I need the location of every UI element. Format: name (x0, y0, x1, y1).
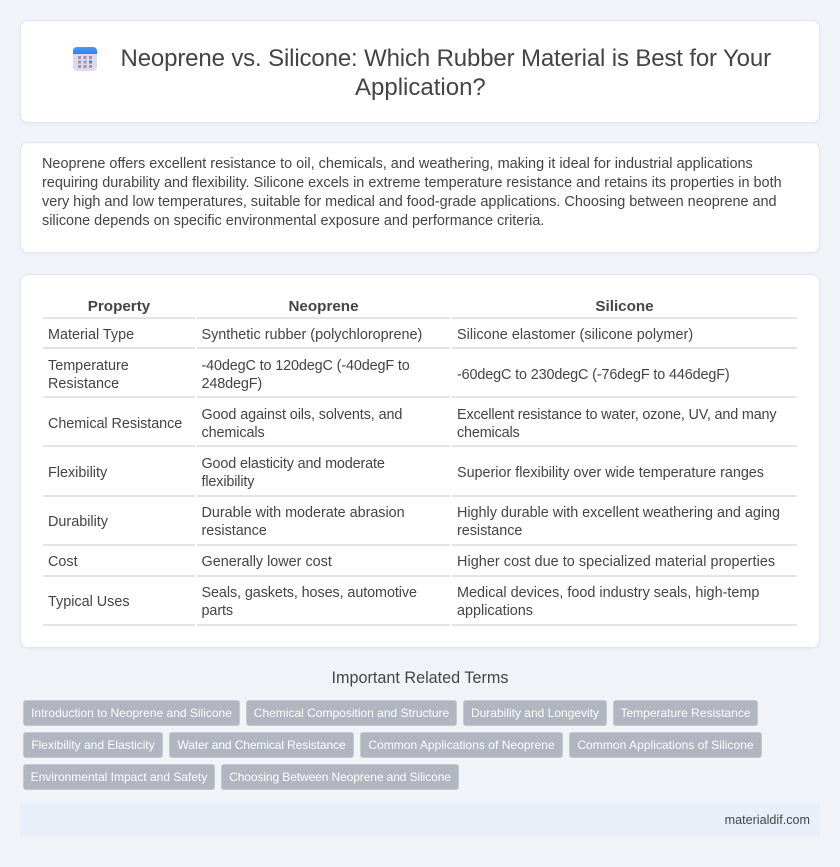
comparison table: Generally lower cost (202, 554, 332, 570)
row: Temperature Resistance (48, 358, 730, 392)
comparison table: Silicone elastomer (silicone polymer) (457, 327, 693, 343)
comparison table: chemicals (202, 425, 265, 441)
tag: Common Applications of Silicone (577, 738, 754, 752)
text: site name: materialdif.com (725, 813, 810, 827)
comparison table: Superior flexibility over wide temperature ranges (457, 465, 764, 481)
column header: Neoprene: Neoprene (288, 298, 359, 315)
tag (169, 732, 354, 758)
tag (463, 700, 607, 726)
tag: Environmental Impact and Safety (31, 770, 207, 784)
text: description paragraph: requiring durability and flexibility. Silicone excels in extreme temperature resistance and retains its properties in both (42, 175, 782, 191)
tag (569, 732, 762, 758)
comparison table: 248degF) (202, 376, 262, 392)
tag (221, 764, 459, 790)
tag: Introduction to Neoprene and Silicone (31, 706, 232, 720)
column header: Silicone: Silicone (595, 298, 654, 315)
comparison table: applications (457, 603, 533, 619)
tag (23, 700, 240, 726)
tag (23, 764, 215, 790)
comparison table: parts (202, 603, 233, 619)
icon: calendar grid (73, 47, 97, 71)
comparison table: Excellent resistance to water, ozone, UV, and many (457, 407, 776, 423)
comparison table: Higher cost due to specialized material properties (457, 554, 775, 570)
tag: Flexibility and Elasticity (31, 738, 155, 752)
comparison table: Temperature (48, 358, 129, 374)
panel: title header (20, 20, 820, 123)
comparison table: -60degC to 230degC (-76degF to 446degF) (457, 367, 730, 383)
footer bar (20, 803, 820, 837)
comparison table: resistance (457, 523, 522, 539)
row: Typical Uses (48, 585, 759, 619)
comparison table: Typical Uses (48, 594, 130, 610)
tag (23, 732, 163, 758)
title: Application? (355, 74, 486, 101)
comparison table: flexibility (202, 474, 254, 490)
comparison table: Good elasticity and moderate (202, 456, 385, 472)
comparison table: Seals, gaskets, hoses, automotive (202, 585, 417, 601)
comparison table: Durability (48, 514, 108, 530)
tag: Water and Chemical Resistance (177, 738, 346, 752)
tag: Common Applications of Neoprene (368, 738, 555, 752)
text: description paragraph: very high and low temperatures, suitable for medical and food-grade applications. Choosing between neoprene and (42, 194, 777, 210)
row: Cost (48, 554, 775, 570)
tag: Temperature Resistance (620, 706, 751, 720)
heading: Important Related Terms: Important Related Terms (332, 669, 508, 687)
tags: related terms (23, 700, 762, 790)
comparison table: Medical devices, food industry seals, high-temp (457, 585, 759, 601)
row: Flexibility (48, 456, 764, 490)
comparison table (43, 298, 797, 626)
tag: Choosing Between Neoprene and Silicone (229, 770, 451, 784)
title (120, 45, 771, 101)
text: description paragraph: Neoprene offers excellent resistance to oil, chemicals, and weathering, making it ideal for industrial applications (42, 156, 753, 172)
panel: description (20, 142, 820, 253)
comparison table: chemicals (457, 425, 520, 441)
tag (613, 700, 758, 726)
comparison table: Good against oils, solvents, and (202, 407, 402, 423)
column header: Property: Property (88, 298, 150, 315)
comparison table: Durable with moderate abrasion (202, 505, 405, 521)
comparison table: -40degC to 120degC (-40degF to (202, 358, 410, 374)
text: description paragraph (42, 156, 782, 229)
tag (360, 732, 563, 758)
title: Neoprene vs. Silicone: Which Rubber Material is Best for Your (120, 45, 771, 72)
tag: Durability and Longevity (471, 706, 599, 720)
comparison table: Material Type (48, 327, 134, 343)
tag: Chemical Composition and Structure (254, 706, 449, 720)
row: Material Type (48, 327, 693, 343)
comparison table: Synthetic rubber (polychloroprene) (202, 327, 422, 343)
text: description paragraph: silicone depends on specific environmental exposure and performance criteria. (42, 213, 544, 229)
comparison table: Highly durable with excellent weathering and aging (457, 505, 780, 521)
panel: comparison table (20, 274, 820, 648)
row: Chemical Resistance (48, 407, 776, 441)
tag (246, 700, 457, 726)
comparison table: resistance (202, 523, 267, 539)
comparison table: Flexibility (48, 465, 107, 481)
comparison table: Chemical Resistance (48, 416, 182, 432)
comparison table: Resistance (48, 376, 119, 392)
row: Durability (48, 505, 780, 539)
comparison table: Cost (48, 554, 78, 570)
